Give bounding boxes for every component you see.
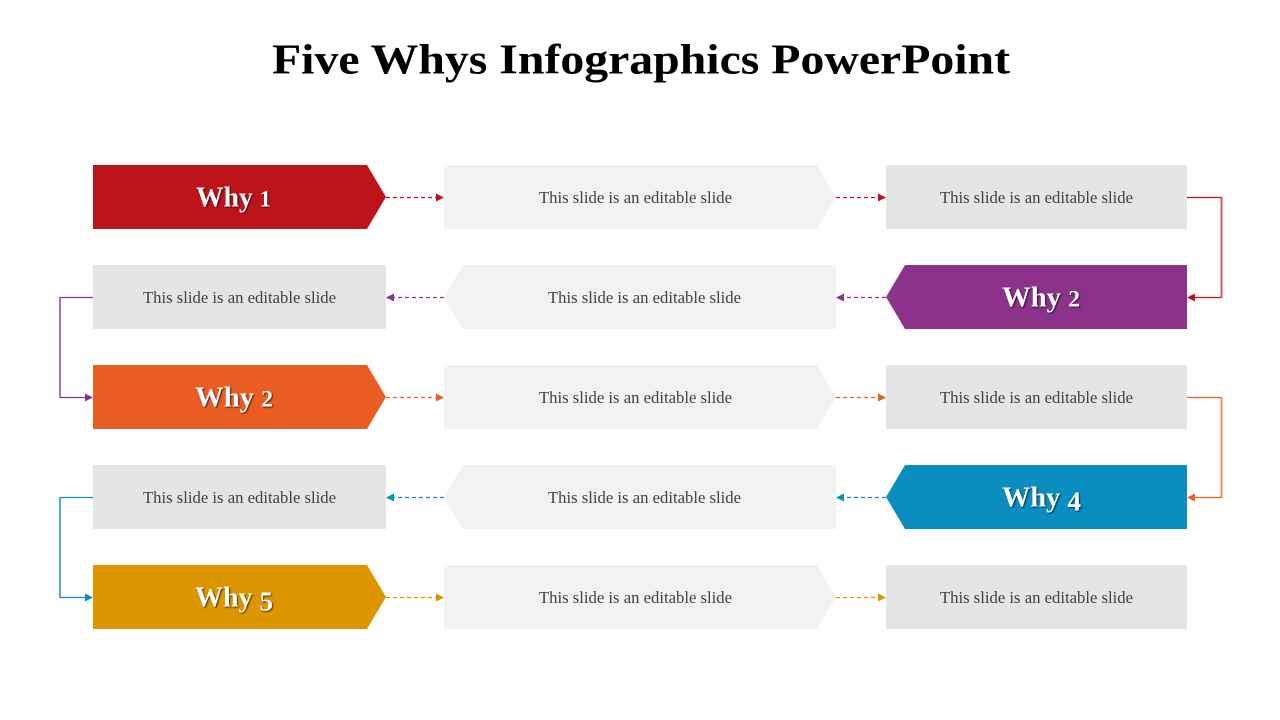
connector: row 2 to row 3 [60,297,93,402]
why 2 arrow box: Why 2 [1002,282,1080,314]
step 1 arrow box [444,165,836,229]
answer 4 box [93,465,386,529]
dashed arrow: orange why to step 3 [386,394,444,402]
why 1 arrow box: Why 1 [196,182,271,214]
why 4 arrow box: 4 [1067,486,1081,516]
dashed arrow: step 2 to answer 2 [386,294,444,302]
dashed arrow: step 1 to answer 1 [836,194,886,202]
answer 5 box: This slide is an editable slide [940,588,1133,607]
why 5 arrow box [93,565,386,629]
row 3: orange why [93,365,1187,429]
why 4 arrow box: Why [1002,482,1060,514]
orange why arrow box: Why 2 [195,382,273,414]
step 4 arrow box: This slide is an editable slide [548,488,741,507]
step 2 arrow box: This slide is an editable slide [548,288,741,307]
step 1 arrow box: This slide is an editable slide [539,188,732,207]
why 4 arrow box [886,465,1187,529]
row 2: why 2 [93,265,1187,329]
step 3 arrow box: This slide is an editable slide [539,388,732,407]
answer 4 box: This slide is an editable slide [143,488,336,507]
row 4: why 4 [93,465,1187,529]
dashed arrow: why 1 to step 1 [386,194,444,202]
connector: row 3 to why 4 [1187,397,1222,502]
connector: row 1 to why 2 [1187,197,1222,302]
orange why arrow box [93,365,386,429]
dashed arrow: step 5 to answer 5 [836,594,886,602]
step 4 arrow box [444,465,836,529]
why 1 arrow box [93,165,386,229]
answer 5 box [886,565,1187,629]
answer 2 box: This slide is an editable slide [143,288,336,307]
answer 2 box [93,265,386,329]
why 2 arrow box [886,265,1187,329]
answer 3 box [886,365,1187,429]
dashed arrow: step 4 to answer 4 [386,494,444,502]
dashed arrow: step 3 to answer 3 [836,394,886,402]
row 5: why 5 [93,565,1187,629]
dashed arrow: why 5 to step 5 [386,594,444,602]
step 2 arrow box [444,265,836,329]
step 5 arrow box: This slide is an editable slide [539,588,732,607]
why 5 arrow box: 5 [260,586,273,616]
answer 1 box [886,165,1187,229]
title: Five Whys Infographics PowerPoint [272,38,1010,84]
connector: row 4 to why 5 [60,497,93,602]
row 1: why 1 [93,165,1187,229]
dashed arrow: why 4 to step 4 [836,494,886,502]
step 5 arrow box [444,565,836,629]
dashed arrow: why 2 to step 2 [836,294,886,302]
answer 3 box: This slide is an editable slide [940,388,1133,407]
step 3 arrow box [444,365,836,429]
why 5 arrow box: Why [195,582,253,614]
answer 1 box: This slide is an editable slide [940,188,1133,207]
